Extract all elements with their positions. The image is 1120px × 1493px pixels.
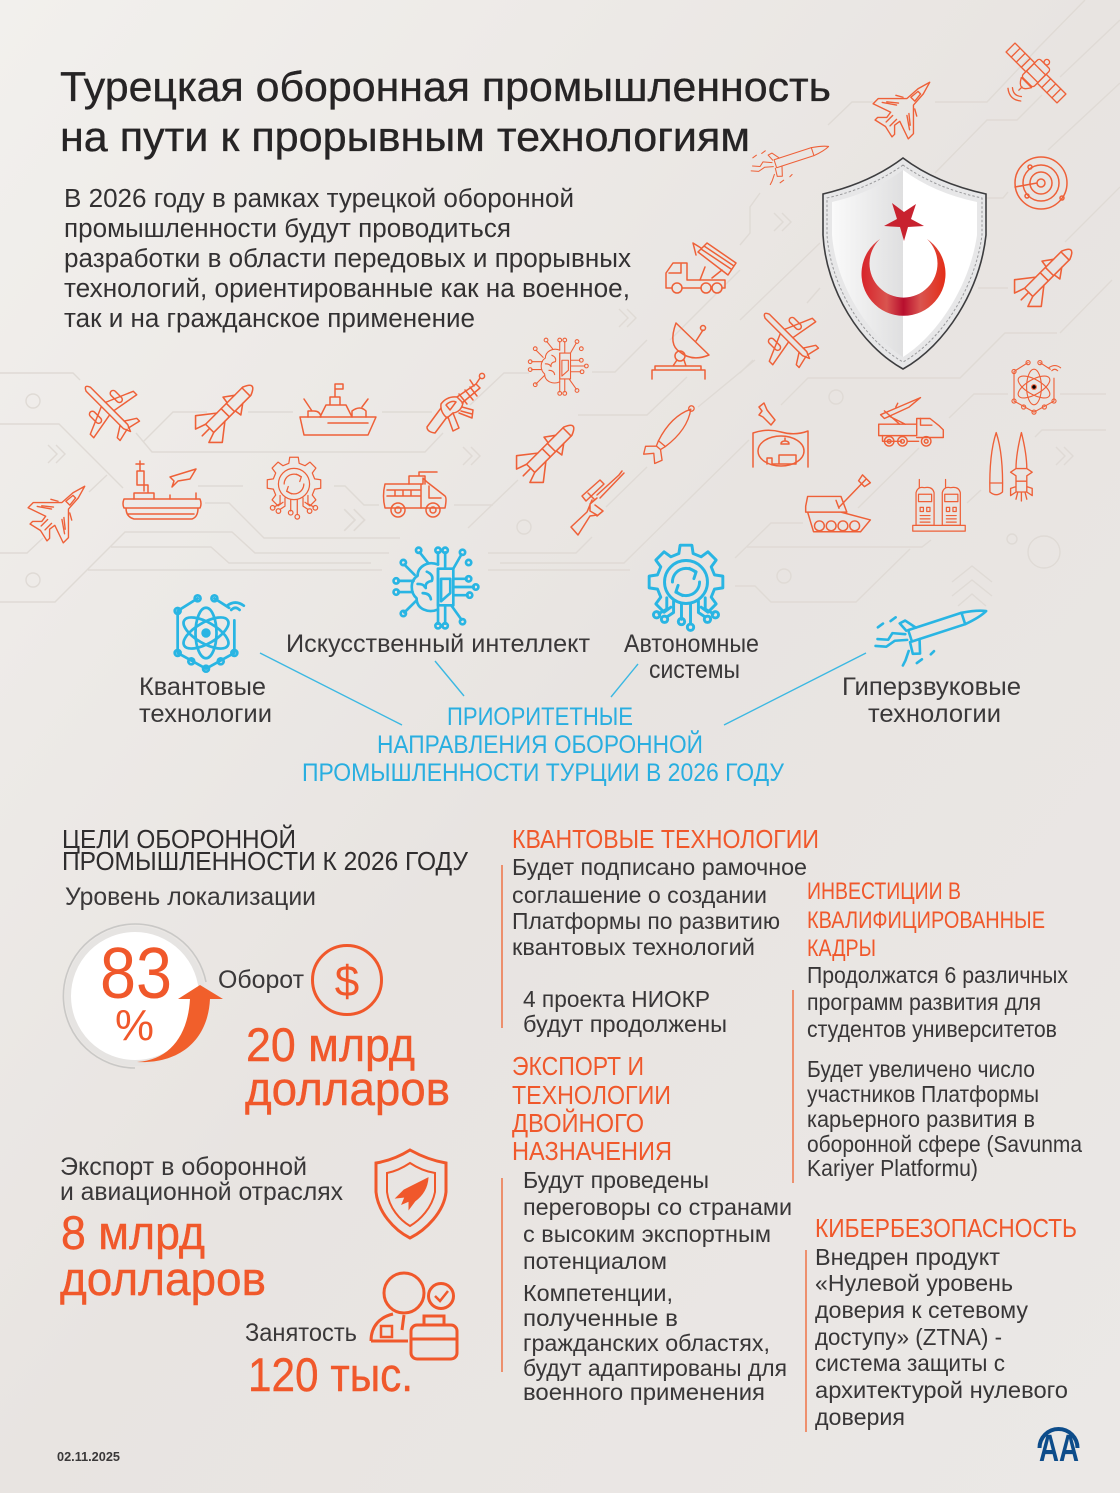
- heading: investment: КВАЛИФИЦИРОВАННЫЕ: [807, 907, 1045, 934]
- icon: satellite: [986, 35, 1074, 123]
- icon: sniper rifle: [571, 471, 624, 535]
- icon: transport plane left: [64, 365, 152, 453]
- icon: autonomous gear: [649, 545, 723, 630]
- priority directions: [139, 545, 1021, 787]
- icon: aircraft carrier: [123, 461, 201, 519]
- icon: rocket launcher truck small: [879, 398, 943, 446]
- icon: quantum atom: [175, 595, 244, 672]
- icon: missile: [189, 373, 265, 449]
- intro text: разработки в области передовых и прорывных: [64, 245, 631, 273]
- label: autonomous: системы: [649, 656, 740, 684]
- icon: hypersonic rocket: [869, 590, 995, 674]
- heading: investment: [807, 878, 1045, 962]
- value: export: [60, 1206, 266, 1305]
- title: на пути к прорывным технологиям: [60, 113, 750, 160]
- label: hypersonic: технологии: [868, 700, 1001, 728]
- heading: investment: ИНВЕСТИЦИИ В: [807, 878, 961, 905]
- text: export: будут адаптированы для: [523, 1355, 787, 1381]
- value: turnover: долларов: [245, 1062, 450, 1115]
- text: investment: Будет увеличено число: [807, 1056, 1035, 1082]
- heading: goals: ПРОМЫШЛЕННОСТИ К 2026 ГОДУ: [62, 846, 468, 876]
- text: quantum: Будет подписано рамочное: [512, 854, 807, 880]
- heading: priorities: ПРОМЫШЛЕННОСТИ ТУРЦИИ В 2026 ГОДУ: [302, 759, 784, 787]
- intro text: В 2026 году в рамках турецкой оборонной: [64, 185, 574, 213]
- icon: missile right: [1008, 237, 1084, 313]
- panel: cybersecurity: [806, 1215, 1077, 1432]
- label: autonomous: [624, 630, 759, 684]
- text: export: гражданских областях,: [523, 1330, 770, 1356]
- connector lines: [260, 653, 866, 725]
- text: cybersecurity: доступу» (ZTNA) -: [815, 1324, 1002, 1350]
- text: cybersecurity: Внедрен продукт: [815, 1244, 1000, 1270]
- value: export: долларов: [60, 1252, 266, 1305]
- icon: atom: [1012, 361, 1061, 414]
- panel: 2026 goals: [60, 824, 468, 1401]
- label: turnover: Оборот: [218, 966, 305, 994]
- text: investment: Kariyer Platformu): [807, 1155, 978, 1181]
- panel: investment in personnel: [793, 878, 1082, 1183]
- heading: export: [512, 1053, 672, 1166]
- icon: dollar: $: [335, 957, 359, 1006]
- label: quantum: технологии: [139, 700, 272, 728]
- heading: investment: КАДРЫ: [807, 935, 876, 962]
- text: export: потенциалом: [523, 1248, 667, 1274]
- date: 02.11.2025: [57, 1450, 120, 1464]
- panel: quantum technologies: [502, 826, 819, 1037]
- text: cybersecurity: «Нулевой уровень: [815, 1270, 1013, 1296]
- text: investment: участников Платформы: [807, 1081, 1039, 1107]
- label: hypersonic: Гиперзвуковые: [842, 673, 1021, 701]
- icons: orange defence equipment: [21, 35, 1084, 550]
- icon: bullets and rocket: [990, 433, 1032, 501]
- text: cybersecurity: система защиты с: [815, 1350, 1005, 1376]
- gauge: 83 percent: %: [115, 1001, 154, 1050]
- icon: rocket launcher truck: [666, 243, 736, 293]
- label: export: и авиационной отраслях: [60, 1178, 343, 1206]
- label: employment: Занятость: [245, 1319, 357, 1347]
- heading: quantum: КВАНТОВЫЕ ТЕХНОЛОГИИ: [512, 826, 819, 854]
- text: export: Компетенции,: [523, 1280, 673, 1306]
- text: investment: [807, 962, 1082, 1181]
- gauge: 83 percent: 83: [100, 934, 172, 1014]
- logo: Anadolu Agency: AA: [1039, 1428, 1079, 1470]
- icon: AI brain: [394, 548, 478, 628]
- text: quantum: будут продолжены: [523, 1011, 727, 1037]
- label: autonomous: Автономные: [624, 630, 759, 658]
- label: export: Экспорт в оборонной: [60, 1153, 307, 1181]
- text: investment: Продолжатся 6 различных: [807, 962, 1068, 988]
- text: investment: студентов университетов: [807, 1016, 1057, 1042]
- icon: radar: [1015, 157, 1067, 209]
- text: cybersecurity: [815, 1244, 1068, 1430]
- intro text: [64, 185, 631, 333]
- text: quantum: соглашение о создании: [512, 882, 767, 908]
- text: quantum: [512, 854, 807, 1037]
- icon: satellite dish: [652, 323, 709, 379]
- heading: cybersecurity: КИБЕРБЕЗОПАСНОСТЬ: [815, 1215, 1077, 1243]
- value: turnover: [245, 1018, 450, 1115]
- icon: dollar: [312, 946, 382, 1014]
- icon: gear: [267, 457, 321, 519]
- icon: self-propelled gun: [806, 475, 870, 532]
- intro text: так и на гражданское применение: [64, 305, 475, 333]
- icon: shield with rocket: [376, 1150, 446, 1238]
- icon: radios: [913, 479, 965, 531]
- text: investment: программ развития для: [807, 989, 1041, 1015]
- heading: priorities: ПРИОРИТЕТНЫЕ: [447, 703, 633, 731]
- label: hypersonic: [842, 673, 1021, 728]
- label: export: [60, 1153, 343, 1206]
- heading: priorities: [302, 703, 784, 787]
- title: [60, 63, 831, 160]
- text: export: с высоким экспортным: [523, 1221, 771, 1247]
- heading: goals: [62, 824, 468, 876]
- text: export: Будут проведены: [523, 1167, 709, 1193]
- intro text: технологий, ориентированные как на военное,: [64, 275, 630, 303]
- heading: export: ЭКСПОРТ И: [512, 1053, 644, 1081]
- icon: armoured vehicle: [384, 472, 446, 517]
- text: export: переговоры со странами: [523, 1194, 792, 1220]
- title: Турецкая оборонная промышленность: [60, 63, 831, 110]
- icon: transport plane: [743, 292, 831, 380]
- text: investment: карьерного развития в: [807, 1106, 1035, 1132]
- icon: shield with star and crescent: [823, 158, 986, 369]
- gauge: 83 percent: [63, 924, 223, 1068]
- label: localisation: Уровень локализации: [65, 883, 316, 911]
- label: quantum: Квантовые: [139, 673, 266, 701]
- value: employment: 120 тыс.: [248, 1348, 413, 1401]
- value: export: 8 млрд: [61, 1206, 205, 1259]
- text: cybersecurity: доверия к сетевому: [815, 1297, 1028, 1323]
- text: investment: оборонной сфере (Savunma: [807, 1131, 1082, 1157]
- icon: mortar shell: [641, 399, 701, 466]
- value: turnover: 20 млрд: [246, 1018, 415, 1071]
- heading: goals: ЦЕЛИ ОБОРОННОЙ: [62, 824, 296, 854]
- icon: assault rifle: [427, 373, 485, 433]
- circuit traces: [0, 0, 1120, 606]
- text: quantum: квантовых технологий: [512, 934, 755, 960]
- icon: fighter jet left: [21, 469, 102, 550]
- text: cybersecurity: доверия: [815, 1404, 905, 1430]
- icon: missile centre: [510, 413, 586, 489]
- label: quantum: [139, 673, 272, 728]
- icon: warship: [300, 384, 376, 435]
- text: quantum: 4 проекта НИОКР: [523, 986, 710, 1012]
- icon: fighter jet top right: [866, 65, 947, 146]
- text: cybersecurity: архитектурой нулевого: [815, 1377, 1068, 1403]
- icon: employee with briefcase: [371, 1273, 457, 1359]
- label: AI: Искусственный интеллект: [286, 630, 591, 658]
- text: quantum: Платформы по развитию: [512, 908, 780, 934]
- heading: export: НАЗНАЧЕНИЯ: [512, 1138, 672, 1166]
- icon: hypersonic missile: [747, 132, 835, 190]
- heading: priorities: НАПРАВЛЕНИЯ ОБОРОННОЙ: [377, 729, 703, 759]
- text: export: полученные в: [523, 1305, 678, 1331]
- intro text: промышленности будут проводиться: [64, 215, 511, 243]
- heading: export: ТЕХНОЛОГИИ: [512, 1082, 671, 1110]
- text: export: [523, 1167, 792, 1405]
- panel: export and dual use: [502, 1053, 792, 1405]
- icon: underground bunker: [753, 403, 808, 467]
- text: export: военного применения: [523, 1379, 765, 1405]
- icon: AI brain chip: [528, 338, 588, 395]
- heading: export: ДВОЙНОГО: [512, 1108, 644, 1138]
